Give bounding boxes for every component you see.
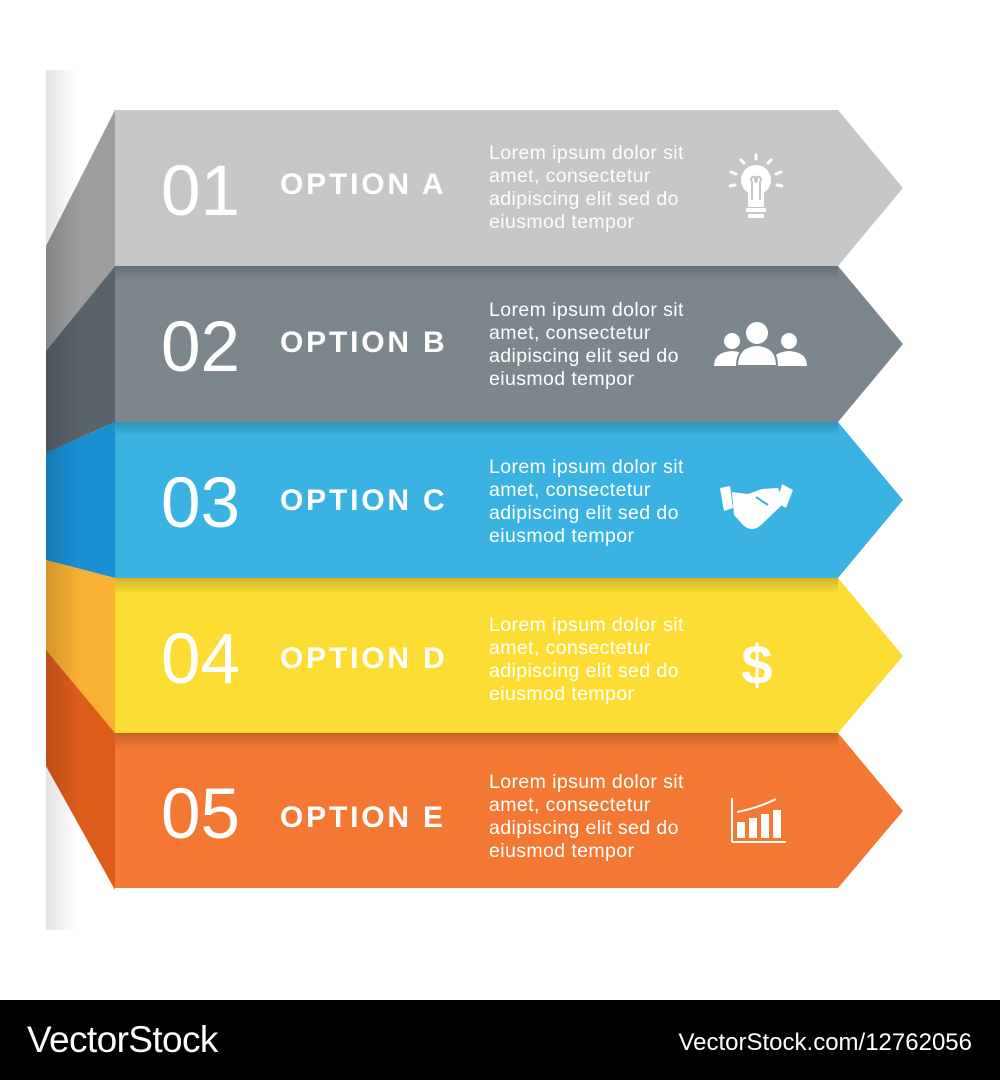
panel: option C: 03: [161, 464, 240, 543]
panel: option B: Lorem ipsum dolor sit: [489, 299, 684, 321]
icon: handshake: [720, 484, 793, 529]
panel: option B: amet, consectetur: [489, 322, 651, 344]
footer: VectorStock.com/12762056: [678, 1029, 972, 1056]
panel: option A: eiusmod tempor: [489, 211, 635, 233]
panel: option E: Lorem ipsum dolor sit: [489, 771, 684, 793]
panel: option D: 04: [161, 620, 240, 699]
panel: option C: eiusmod tempor: [489, 525, 635, 547]
panel: option A: Lorem ipsum dolor sit: [489, 142, 684, 164]
side face A: [46, 110, 115, 351]
icon: light bulb: [730, 155, 782, 218]
panel: option D: adipiscing elit sed do: [489, 660, 679, 682]
panel: option A: OPTION A: [280, 168, 446, 201]
panel: option D: Lorem ipsum dolor sit: [489, 614, 684, 636]
icon: bar chart: [732, 798, 786, 842]
footer: VectorStock: [27, 1019, 219, 1060]
panel: option A: 01: [161, 152, 240, 231]
icon: dollar: $: [741, 633, 773, 696]
panel: option B: adipiscing elit sed do: [489, 345, 679, 367]
panel: option B: 02: [161, 308, 240, 387]
panel: option A: adipiscing elit sed do: [489, 188, 679, 210]
side face E: [46, 650, 115, 890]
side face D: [46, 560, 115, 733]
panel: option E: OPTION E: [280, 801, 446, 834]
side face B: [46, 266, 115, 453]
panel: option D: OPTION D: [280, 642, 447, 675]
footer: [0, 1000, 1000, 1080]
panel: option D: eiusmod tempor: [489, 683, 635, 705]
panel: option C: adipiscing elit sed do: [489, 502, 679, 524]
panel: option B: [115, 266, 903, 422]
panel: option E: eiusmod tempor: [489, 840, 635, 862]
panel: option D: amet, consectetur: [489, 637, 651, 659]
panel: option E: amet, consectetur: [489, 794, 651, 816]
panel: option B: OPTION B: [280, 326, 447, 359]
side face C: [46, 422, 115, 578]
panel: option B: eiusmod tempor: [489, 368, 635, 390]
panel: option D: [115, 578, 903, 733]
panel: option C: [115, 422, 903, 578]
panel: option A: [115, 110, 903, 266]
panel: option E: 05: [161, 775, 240, 854]
panel: option E: adipiscing elit sed do: [489, 817, 679, 839]
panel: option C: Lorem ipsum dolor sit: [489, 456, 684, 478]
panel: option C: amet, consectetur: [489, 479, 651, 501]
panel: option A: amet, consectetur: [489, 165, 651, 187]
panel: option E: [115, 733, 903, 888]
background wall shadow: [46, 70, 76, 930]
icon: people: [714, 322, 807, 366]
panel: option C: OPTION C: [280, 484, 447, 517]
